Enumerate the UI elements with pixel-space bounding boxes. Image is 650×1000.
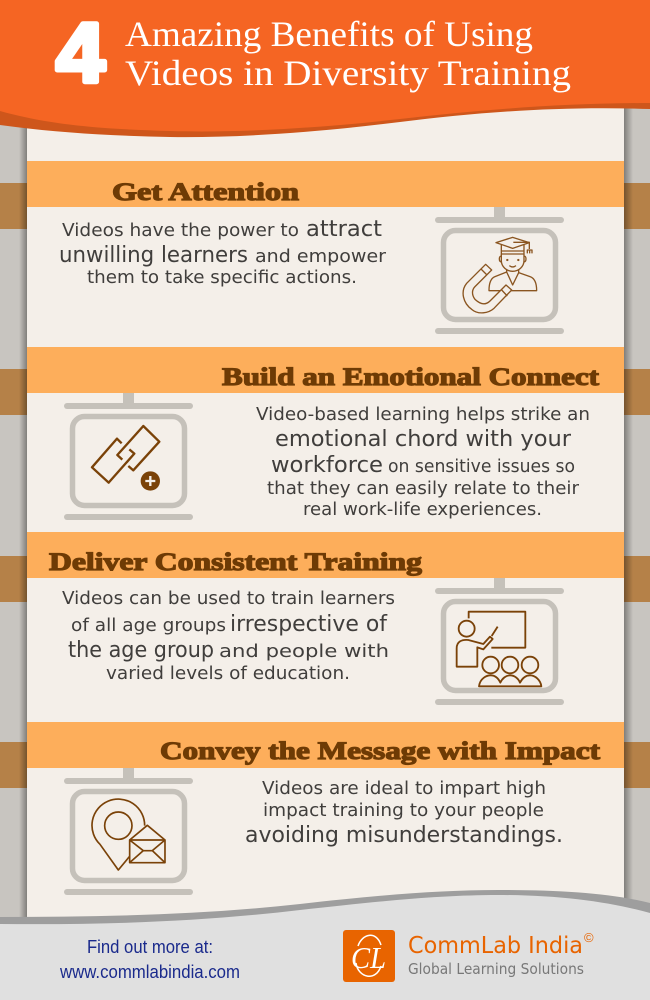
icon: graduate and magnet on screen bbox=[435, 207, 564, 334]
logo wordmark: Global Learning Solutions bbox=[408, 960, 584, 978]
text block: get attention: and empower bbox=[255, 247, 387, 267]
heading band: get attention bbox=[27, 161, 624, 207]
text block: get attention: them to take specific actions. bbox=[87, 268, 357, 288]
text block: emotional connect: emotional chord with your bbox=[275, 427, 572, 452]
text block: get attention: unwilling learners bbox=[59, 243, 248, 268]
icon: location pin and envelope on screen bbox=[64, 768, 193, 895]
heading band: consistent training bbox=[27, 532, 624, 578]
footer bbox=[0, 890, 650, 1000]
text block: consistent training: and people with bbox=[219, 642, 389, 662]
big number 4: 4 bbox=[56, 6, 105, 100]
find out more text bbox=[59, 937, 240, 982]
text block: emotional connect bbox=[256, 405, 590, 520]
heading: get attention: Get Attention bbox=[112, 177, 299, 206]
logo mark: CL bbox=[351, 940, 386, 975]
text block: message with impact bbox=[245, 779, 563, 848]
text block: consistent training: Videos can be used to train learners bbox=[62, 589, 395, 609]
main content panel bbox=[27, 100, 624, 930]
title: Videos in Diversity Training bbox=[125, 53, 571, 93]
text block: consistent training bbox=[62, 589, 395, 684]
text block: get attention bbox=[59, 217, 387, 288]
logo wordmark: © bbox=[584, 930, 594, 945]
panel: emotional connect bbox=[27, 347, 624, 520]
text block: get attention: Videos have the power to bbox=[62, 221, 299, 241]
text block: message with impact: impact training to your people bbox=[263, 801, 544, 821]
icon: trainer and class on screen bbox=[435, 578, 564, 705]
icon: chain link on screen bbox=[64, 393, 193, 520]
text block: get attention: attract bbox=[306, 217, 382, 242]
text block: emotional connect: Video-based learning helps strike an bbox=[256, 405, 590, 425]
heading: consistent training: Deliver Consistent Training bbox=[49, 547, 422, 576]
text block: emotional connect: workforce bbox=[271, 453, 383, 478]
logo wordmark bbox=[408, 930, 594, 978]
title: Amazing Benefits of Using bbox=[125, 14, 533, 54]
text block: emotional connect: on sensitive issues so bbox=[388, 457, 575, 477]
text block: emotional connect: that they can easily relate to their bbox=[267, 479, 580, 499]
text block: emotional connect: real work-life experiences. bbox=[303, 500, 542, 520]
text block: consistent training: the age group bbox=[68, 638, 214, 663]
text block: consistent training: of all age groups bbox=[71, 616, 226, 636]
find out more text: www.commlabindia.com bbox=[59, 962, 240, 982]
text block: message with impact: avoiding misunderstandings. bbox=[245, 823, 563, 848]
text block: consistent training: varied levels of education. bbox=[106, 664, 350, 684]
heading band: message with impact bbox=[27, 722, 624, 768]
panel: get attention bbox=[27, 161, 624, 334]
find out more text: Find out more at: bbox=[87, 937, 213, 957]
heading: message with impact: Convey the Message with Impact bbox=[160, 736, 601, 765]
logo wordmark: CommLab India bbox=[408, 933, 583, 959]
text block: consistent training: irrespective of bbox=[230, 612, 388, 637]
panel: message with impact bbox=[27, 722, 624, 895]
heading: emotional connect: Build an Emotional Connect bbox=[222, 362, 600, 391]
logo mark bbox=[343, 930, 395, 982]
panel: consistent training bbox=[27, 532, 624, 705]
text block: message with impact: Videos are ideal to impart high bbox=[262, 779, 546, 799]
header banner bbox=[0, 0, 650, 137]
title bbox=[125, 14, 571, 93]
heading band: emotional connect bbox=[27, 347, 624, 393]
